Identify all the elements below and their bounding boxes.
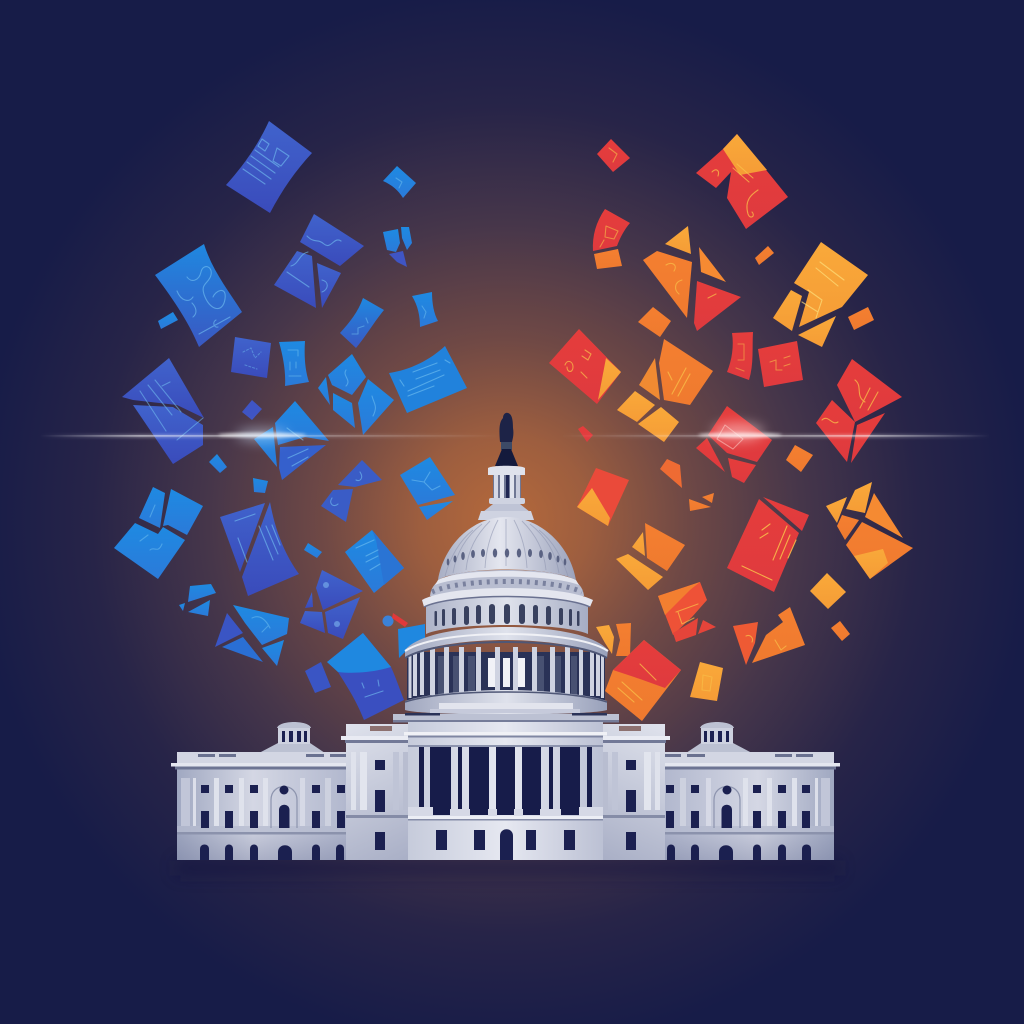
orange sliver xyxy=(755,246,774,265)
lens flare left xyxy=(40,428,500,442)
blue cross doc mid xyxy=(300,570,363,639)
blue doc at flare xyxy=(254,401,329,480)
blue big two-tone doc xyxy=(327,633,404,720)
peristyle xyxy=(422,588,593,634)
red narrow page xyxy=(727,332,753,380)
capitol building xyxy=(171,413,840,860)
central portico xyxy=(404,722,607,860)
blue wide page xyxy=(389,346,467,413)
blue doc top xyxy=(226,121,312,213)
dome shell xyxy=(438,517,576,580)
orange chip mid xyxy=(786,445,813,472)
orange cross doc xyxy=(643,226,741,331)
red-orange broken page xyxy=(658,582,716,642)
red square page xyxy=(758,341,803,387)
red-amber page xyxy=(577,468,629,526)
blue sliver lower xyxy=(209,454,227,473)
statue xyxy=(495,413,518,466)
amber cross doc right xyxy=(826,482,913,579)
amber doc with crack xyxy=(773,242,868,347)
orange cracked page xyxy=(733,607,805,665)
blue small doc low xyxy=(305,662,331,693)
small dome xyxy=(259,722,325,753)
wing body xyxy=(171,752,346,860)
blue curved page xyxy=(340,298,384,348)
blue tall doc xyxy=(220,502,299,596)
blue crack doc xyxy=(321,460,382,522)
blue page mid xyxy=(345,530,404,593)
amber page xyxy=(690,662,723,701)
blue shards behind dome xyxy=(382,613,425,658)
red chip xyxy=(578,426,593,442)
central dome xyxy=(393,413,619,726)
orange diamond small xyxy=(831,621,850,641)
red tall doc xyxy=(727,497,809,592)
red curved page xyxy=(593,209,630,269)
blue cross doc xyxy=(318,354,394,435)
amber broken page xyxy=(616,523,685,590)
lens flare right xyxy=(560,423,990,441)
red small square xyxy=(597,139,630,172)
balustrade ring xyxy=(430,570,584,596)
orange rect xyxy=(638,307,671,337)
blue tiny square xyxy=(253,478,268,493)
red cross doc at flare xyxy=(696,406,772,483)
pavilion xyxy=(341,724,409,860)
orange chip right xyxy=(848,307,874,330)
red three-part doc xyxy=(816,359,902,463)
blue sliver xyxy=(158,312,178,329)
red-amber broken doc xyxy=(696,134,788,229)
left wing with pavilion xyxy=(171,722,409,860)
colonnade roof ledge xyxy=(405,627,608,658)
blue small square xyxy=(383,166,416,198)
blue broken doc upper xyxy=(274,214,364,308)
amber shards behind dome xyxy=(596,623,631,656)
red and orange document fragments xyxy=(549,134,913,721)
red and orange large doc xyxy=(605,640,681,721)
steps xyxy=(393,703,619,726)
orange shard xyxy=(660,459,682,488)
blue large doc left xyxy=(155,244,242,347)
lantern xyxy=(478,466,534,520)
blue document fragments xyxy=(114,121,467,720)
blue tall page xyxy=(279,341,309,386)
right wing mirrored xyxy=(602,722,840,860)
blue left broken doc xyxy=(114,487,203,579)
orange shattered doc center xyxy=(617,339,713,442)
orange tiny shards xyxy=(689,493,714,511)
blue diamond xyxy=(242,400,262,420)
blue small page xyxy=(412,292,438,327)
red doc with amber corner xyxy=(549,329,621,404)
blue tiny shards xyxy=(179,584,216,616)
blue large doc crossed xyxy=(122,358,204,464)
blue page right xyxy=(400,457,455,520)
amber diamond xyxy=(810,573,846,609)
colonnade base xyxy=(405,690,607,714)
blue square doc xyxy=(231,337,271,378)
colonnade xyxy=(407,647,605,700)
ground shadow xyxy=(175,860,840,876)
blue cross doc lower left xyxy=(215,605,289,666)
blue tiny broken xyxy=(383,227,412,267)
blue chip xyxy=(304,543,322,558)
